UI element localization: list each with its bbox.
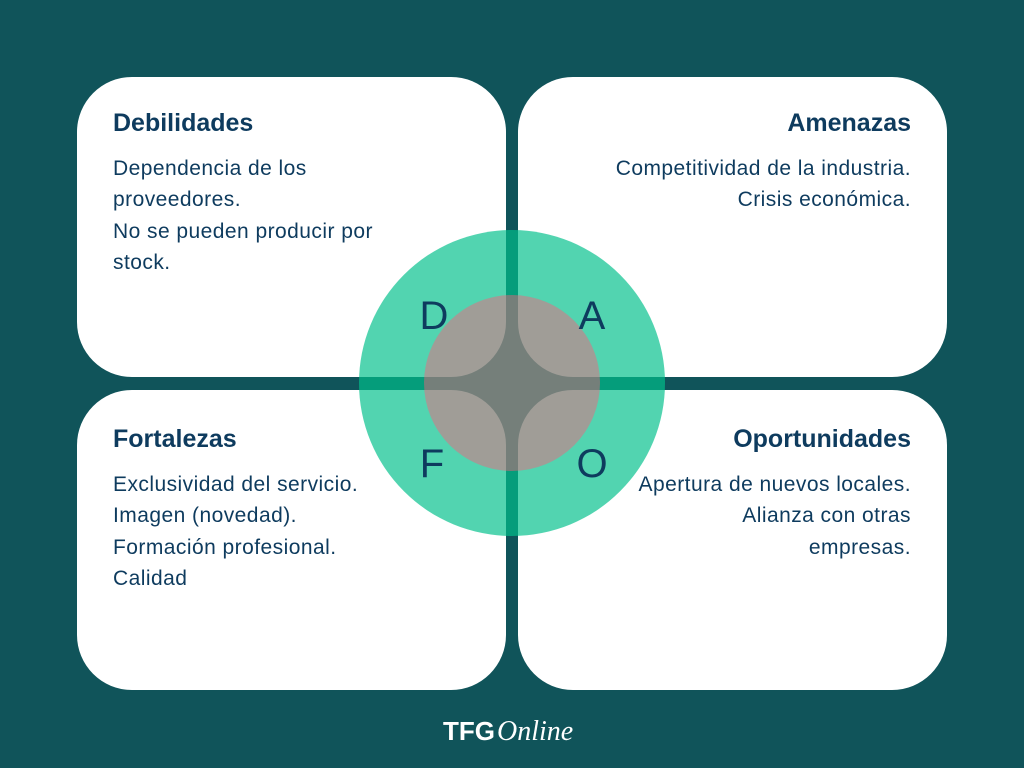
text: oportunidades list: empresas. <box>809 536 911 559</box>
heading: oportunidades: Oportunidades <box>733 425 911 453</box>
letter F: F <box>420 442 444 486</box>
letter D: D <box>420 294 448 338</box>
text: amenazas list: Competitividad de la industria. <box>616 157 911 180</box>
text: fortalezas list: Imagen (novedad). <box>113 504 297 527</box>
text: oportunidades list <box>639 473 911 559</box>
panel: amenazas <box>518 77 947 377</box>
logo: TFG <box>443 716 495 746</box>
text: oportunidades list: Apertura de nuevos locales. <box>639 473 911 496</box>
logo <box>443 716 573 747</box>
heading: amenazas: Amenazas <box>787 109 911 137</box>
text: fortalezas list <box>113 473 358 590</box>
text: debilidades list <box>113 157 373 274</box>
panel: oportunidades <box>518 390 947 690</box>
panel: debilidades <box>77 77 506 377</box>
text: amenazas list <box>616 157 911 211</box>
panel: fortalezas <box>77 390 506 690</box>
text: fortalezas list: Formación profesional. <box>113 536 336 559</box>
text: debilidades list: stock. <box>113 251 171 274</box>
text: amenazas list: Crisis económica. <box>738 188 911 211</box>
text: oportunidades list: Alianza con otras <box>742 504 911 527</box>
text: fortalezas list: Exclusividad del servicio. <box>113 473 358 496</box>
text: debilidades list: Dependencia de los <box>113 157 307 180</box>
center DAFO circle <box>359 230 665 536</box>
letter O: O <box>576 442 608 486</box>
text: debilidades list: proveedores. <box>113 188 241 211</box>
text: debilidades list: No se pueden producir por <box>113 220 373 243</box>
text: fortalezas list: Calidad <box>113 567 187 590</box>
heading: debilidades: Debilidades <box>113 109 253 137</box>
letter A: A <box>579 294 606 338</box>
heading: fortalezas: Fortalezas <box>113 425 237 453</box>
logo: Online <box>497 716 573 747</box>
